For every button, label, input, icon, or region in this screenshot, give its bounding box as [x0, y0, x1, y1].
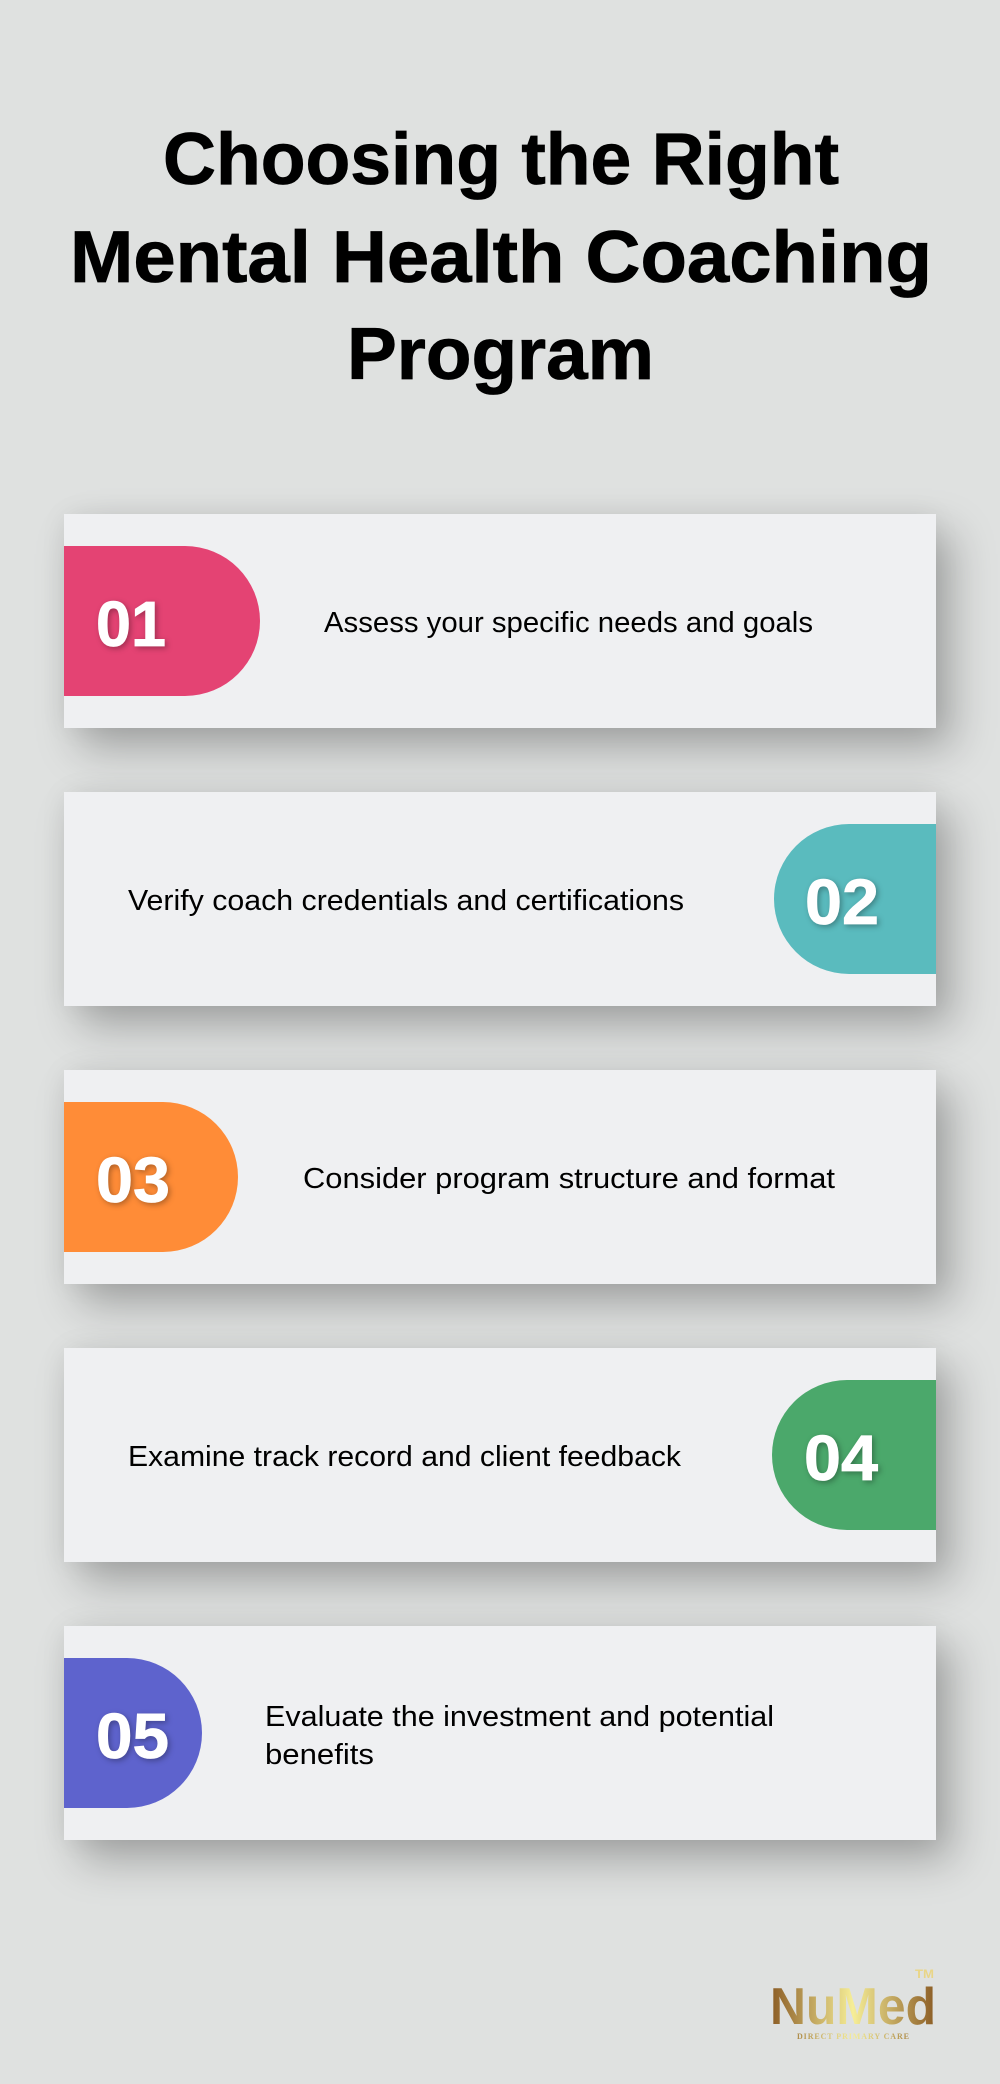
text: step 05: [265, 1701, 774, 1771]
badge: 03: [64, 1102, 238, 1252]
text: step 02: Verify coach credentials and certifications: [128, 885, 684, 917]
panel: step 03: [64, 1070, 936, 1284]
number 03: 03: [96, 1144, 170, 1216]
badge: 05: [64, 1658, 202, 1808]
title: [70, 119, 932, 395]
text: step 05: benefits: [265, 1739, 374, 1771]
panel: step 05: [64, 1626, 936, 1840]
panel: step 04: [64, 1348, 936, 1562]
text: step 03: Consider program structure and format: [303, 1163, 835, 1195]
logo: NuMed: DIRECT PRIMARY CARE: [797, 2032, 909, 2041]
badge: 02: [774, 824, 936, 974]
number 04: 04: [804, 1422, 878, 1494]
text: step 05: Evaluate the investment and potential: [265, 1701, 774, 1733]
number 05: 05: [96, 1700, 169, 1772]
panel: step 02: [64, 792, 936, 1006]
badge: 04: [772, 1380, 936, 1530]
logo: NuMed: NuMed: [770, 1978, 936, 2036]
number 01: 01: [96, 588, 166, 660]
title: Mental Health Coaching: [70, 217, 932, 298]
panel: step 01: [64, 514, 936, 728]
text: step 01: Assess your specific needs and goals: [324, 607, 813, 639]
text: step 04: Examine track record and client feedback: [128, 1441, 682, 1473]
title: Program: [347, 314, 654, 395]
logo: NuMed: TM: [915, 1967, 934, 1981]
badge: 01: [64, 546, 260, 696]
title: Choosing the Right: [163, 119, 839, 200]
number 02: 02: [805, 866, 879, 938]
